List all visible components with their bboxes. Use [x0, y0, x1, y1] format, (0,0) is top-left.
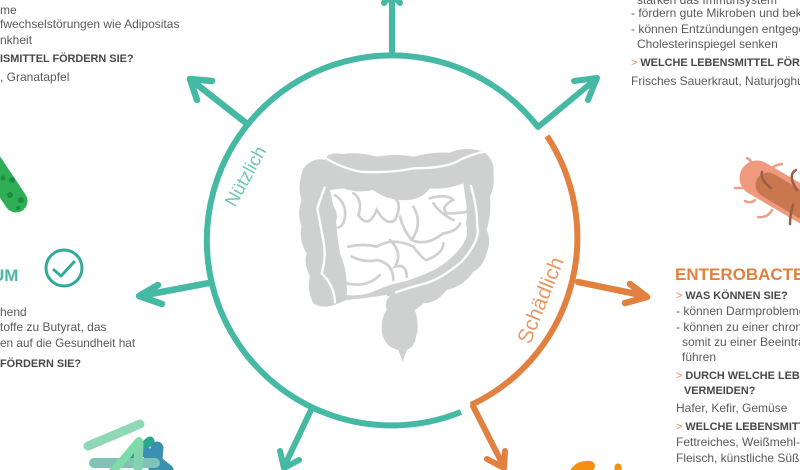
arrow: right: [578, 282, 647, 303]
line: left panel 3: en auf die Gesundheit hat: [0, 336, 135, 350]
icon: teal bacteria cluster: [88, 424, 168, 470]
heading: left panel: FÖRDERN SIE?: [0, 358, 81, 370]
arrow: bottom left: [280, 410, 311, 468]
line: top right 4: Cholesterinspiegel senken: [637, 37, 778, 51]
intestine left inner strip: [320, 202, 347, 303]
arrow: upper left: [190, 79, 246, 123]
heading: vermeiden line 2: VERMEIDEN?: [684, 385, 755, 397]
icon: orange bacterium: [735, 158, 800, 224]
line: left panel 1: hend: [0, 305, 27, 319]
line: hafer: Hafer, Kefir, Gemüse: [676, 401, 787, 415]
line: führen: führen: [682, 350, 716, 364]
label: Schädlich: Schädlich: [513, 254, 569, 347]
orange arc: schädlich: [471, 136, 577, 405]
icon: orange food bottom: [575, 466, 618, 470]
arrow: top: [384, 0, 400, 54]
line: Granatapfel: , Granatapfel: [0, 70, 69, 84]
line: top left: me: [0, 3, 17, 17]
intestine right inner strip: [387, 183, 480, 297]
icon: check mark: [46, 250, 82, 286]
arrow: bottom right: [473, 406, 505, 468]
line: left panel 2: toffe zu Butyrat, das: [0, 320, 107, 334]
icon: intestine: [299, 149, 494, 362]
icon: green bacterium: [0, 165, 24, 210]
heading: was können sie: > WAS KÖNNEN SIE?: [676, 290, 788, 302]
teal arc: nützlich: [207, 55, 538, 425]
label: Nützlich: Nützlich: [220, 142, 270, 210]
intestine cavity: [330, 183, 470, 295]
small intestine loops: [335, 193, 467, 285]
line: Krankheit: nkheit: [0, 33, 32, 47]
heading: Lebensmittel: ISMITTEL FÖRDERN SIE?: [0, 53, 134, 65]
arrow: upper right: [538, 78, 597, 127]
white separators: [317, 152, 485, 303]
arrow: left: [139, 283, 209, 304]
line: Stoffwechselstörungen: fwechselstörungen wie Adipositas: [0, 17, 179, 31]
